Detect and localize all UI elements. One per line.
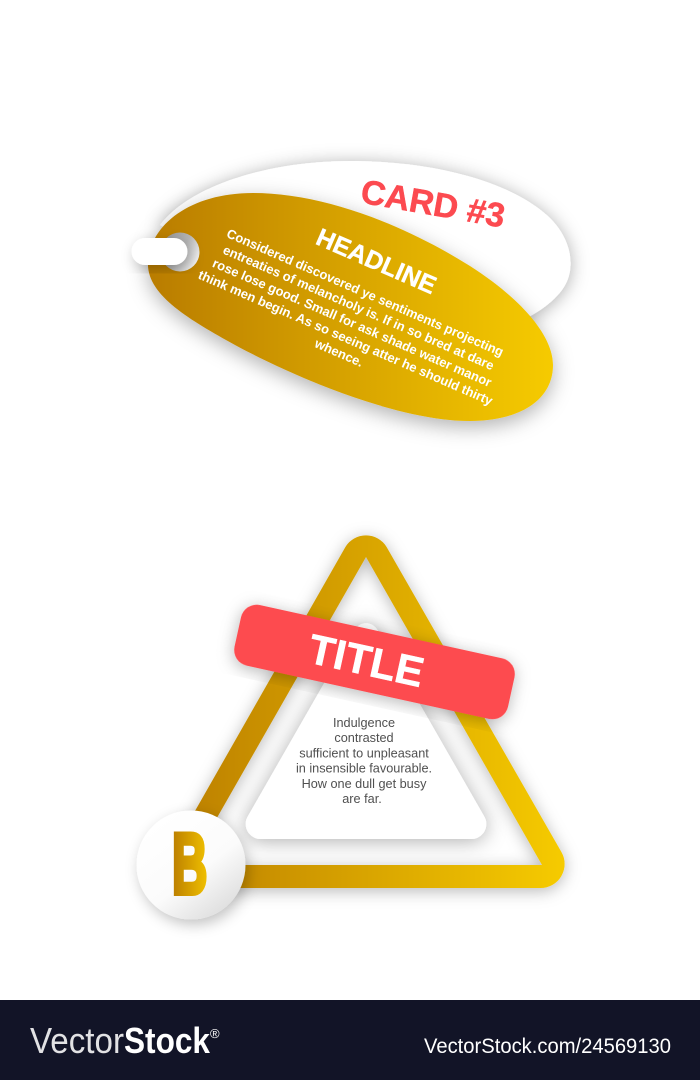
panel: oval tag cards — [132, 161, 571, 424]
card body text: rose lose good. Small for ask shade water manor — [210, 255, 494, 390]
gold triangle frame — [168, 535, 565, 888]
card headline: HEADLINE — [312, 223, 440, 300]
triangle body text: contrasted — [334, 731, 394, 745]
triangle body text: in insensible favourable. — [296, 762, 432, 776]
card body text: think men begin. As so seeing atter he should thirty — [196, 267, 496, 409]
logo wordmark — [30, 1020, 220, 1061]
footer image id: VectorStock.com/24569130 — [424, 1035, 671, 1058]
triangle body text: sufficient to unpleasant — [299, 746, 429, 760]
panel: triangle card — [136, 535, 565, 920]
white slot pill — [132, 238, 188, 265]
back card: white oval — [160, 161, 571, 325]
logo wordmark: Vector — [30, 1020, 124, 1061]
card body text — [190, 222, 515, 424]
card body text: Considered discovered ye sentiments projecting — [224, 226, 506, 359]
triangle body text: Indulgence — [333, 716, 395, 730]
hole in gold card — [160, 232, 200, 272]
logo wordmark: Stock — [124, 1020, 211, 1061]
card body text: entreaties of melancholy is. If in so bred at dare — [221, 242, 496, 373]
badge letter B: B — [172, 816, 207, 912]
letter badge — [136, 810, 246, 920]
logo wordmark: ® — [210, 1026, 220, 1041]
triangle body text — [296, 716, 432, 806]
footer bar — [0, 1000, 700, 1080]
card body text: whence. — [312, 335, 366, 370]
triangle body text: are far. — [342, 792, 382, 806]
card number label: CARD #3 — [358, 173, 508, 236]
inner white triangle — [246, 623, 486, 839]
triangle body text: How one dull get busy — [302, 777, 427, 791]
red title banner — [231, 602, 518, 722]
banner title: TITLE — [304, 625, 428, 696]
front card: gold oval — [148, 193, 553, 421]
